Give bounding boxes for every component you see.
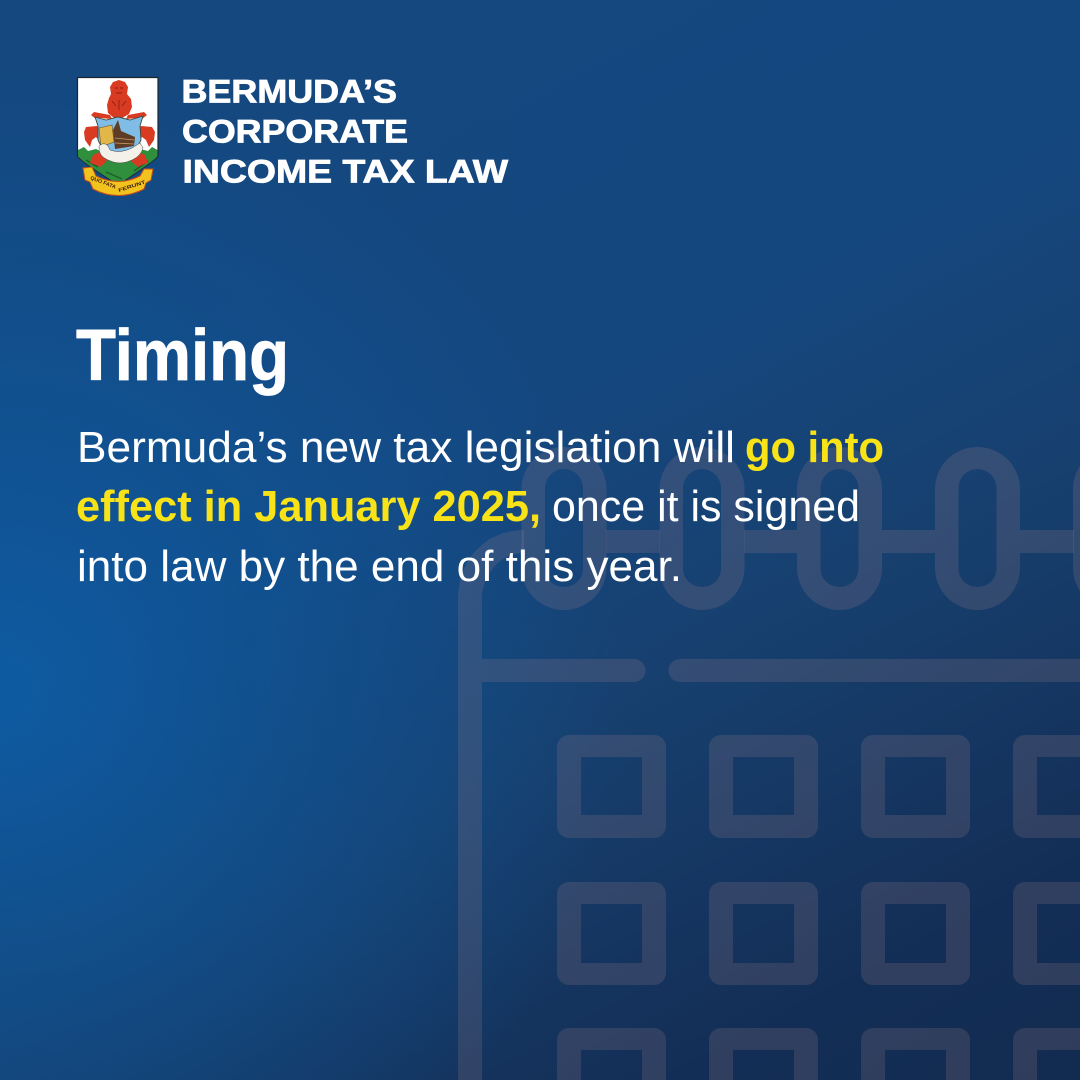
calendar outline: left side and top bar: [458, 530, 1080, 1080]
ship: [113, 120, 135, 149]
grass: [78, 147, 158, 184]
text: Bermuda's Corporate Income Tax Law heading: [182, 74, 509, 190]
text: Bermuda's Corporate Income Tax Law heading: BERMUDA’S: [182, 74, 397, 110]
text block: timing description: once it is signed: [552, 482, 860, 531]
text block: timing description: Bermuda’s new tax legislation will: [77, 423, 735, 472]
text: Bermuda's Corporate Income Tax Law heading: CORPORATE: [182, 114, 408, 150]
text: Bermuda's Corporate Income Tax Law heading: INCOME TAX LAW: [182, 154, 509, 190]
calendar binder rings: [522, 447, 1080, 610]
shield scene: [95, 116, 143, 158]
icon: Bermuda coat of arms: [76, 76, 159, 196]
text block: timing description: go into: [745, 423, 884, 472]
text block: timing description: into law by the end of this year.: [77, 542, 682, 591]
lion supporter: [84, 80, 155, 167]
motto text end: FERUNT: [118, 180, 146, 194]
text block: timing description: effect in January 2025,: [76, 482, 541, 531]
motto text: QUO FATA: [89, 175, 117, 191]
text block: timing description: [76, 423, 884, 591]
cliff: [99, 125, 114, 147]
swan waves: [99, 143, 143, 163]
calendar date squares: [557, 735, 1080, 1080]
shield: [78, 78, 158, 185]
motto ribbon: [83, 167, 153, 196]
